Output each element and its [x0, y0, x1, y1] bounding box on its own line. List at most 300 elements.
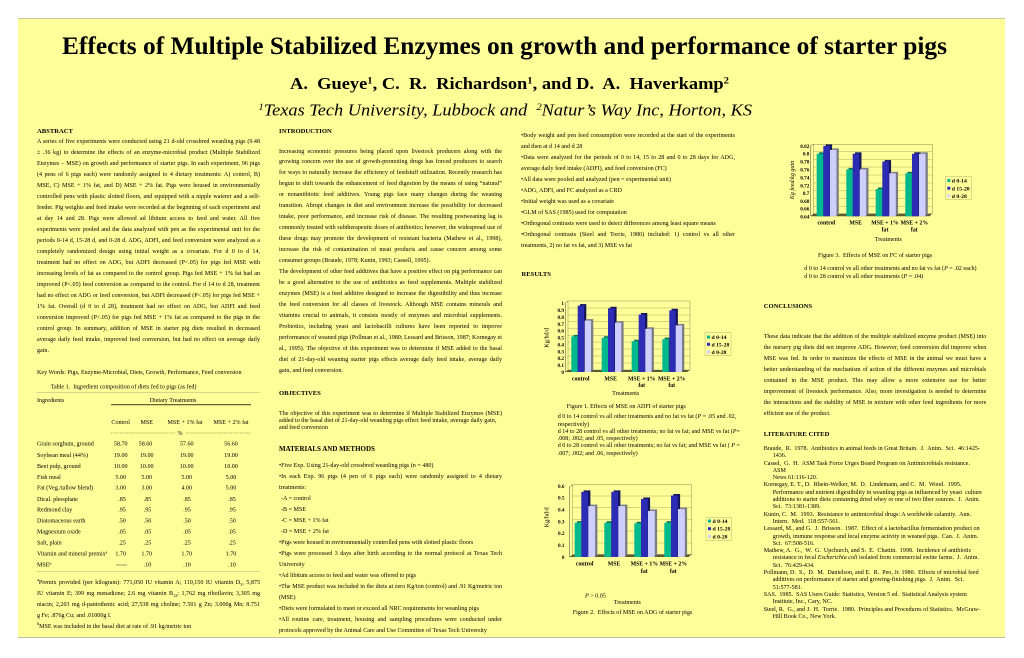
introduction text: begun to shift towards the enhancement of feed digestion by the means of using “natural” — [279, 181, 502, 187]
bars: control — [575, 490, 597, 557]
y axis title: Kg/hd/d — [544, 328, 550, 348]
table rows: 5.00 — [141, 475, 152, 481]
literature cited list: Performance and nutrient digestibility in weanling pigs as influenced by yeast culture — [773, 490, 982, 496]
objectives text: and feed conversion — [279, 425, 328, 431]
introduction text: Probiotics, including yeast and lactobacilli cultures have been reported to improve — [279, 324, 502, 330]
literature cited list: Kunin, C. M. 1993. Resistance to antimicrobial drugs: A worldwide calamity. Ann. — [764, 512, 971, 518]
y axis labels — [558, 484, 565, 561]
bars: MSE + 2% fat — [905, 152, 928, 216]
materials and methods list: University — [279, 562, 305, 568]
introduction text: consumer groups (Braude, 1978; Kunin, 1993; Cassell, 1995). — [279, 258, 430, 264]
table rows: 10.00 — [140, 464, 154, 470]
introduction text: for ways to naturally increase the efficiency of feedstuff utilization. Recently research has — [279, 170, 502, 176]
materials and methods list: protocols approved by the Animal Care and Use Committee of Texas Tech University — [279, 628, 487, 634]
table rows: 3.00 — [141, 486, 152, 492]
literature cited list — [764, 446, 982, 620]
x axis labels: MSE — [849, 220, 862, 226]
introduction text: vitamins crucial to animals, it consists mostly of enzymes and microbial supplements. — [279, 313, 502, 319]
x axis title: Treatments — [614, 600, 641, 606]
x axis labels: MSE — [604, 376, 617, 382]
table rows: 19.00 — [140, 453, 154, 459]
y axis labels: 0.9 — [558, 308, 564, 314]
methods list continued: •Initial weight was used as a covariate — [521, 199, 614, 205]
literature cited list: Pollmann, D. S., D. M. Danielson, and E. R. Peo, Jr. 1980. Effects of microbial feed — [764, 570, 979, 576]
x axis labels: fat — [911, 228, 918, 234]
table header: % — [177, 431, 183, 437]
table rows: .25 — [183, 540, 191, 546]
figure 1 caption: Figure 1. Effects of MSE on ADFI of starter pigs — [567, 404, 686, 410]
x axis labels: MSE + 1% — [631, 562, 658, 568]
table rows: 5.00 — [115, 475, 126, 481]
legend: d 0-14 — [712, 519, 728, 525]
abstract text: control group. In summary, addition of MSE in starter pig diets resulted in decreased — [37, 326, 260, 332]
authors: , C. R. Richardson — [373, 74, 527, 93]
literature cited list: growth, immune response and fecal enzyme activity in weaned pigs. Can. J. Anim. — [773, 534, 978, 540]
heading: materials and methods: MATERIALS AND METHODS — [279, 445, 375, 453]
conclusions text: MSE was fed. In order to maximize the effects of MSE in the animal we must have a — [764, 356, 986, 362]
abstract text: conversion improved (P<.05) for pigs fed MSE + 1% fat as compared to the pigs in the — [37, 315, 260, 321]
methods list continued: •Body weight and pen feed consumption were recorded at the start of the experiments — [521, 133, 735, 139]
materials and methods list: -B = MSE — [281, 507, 306, 513]
chart: figure 1 ADFI — [544, 300, 732, 397]
x axis labels: control — [817, 220, 835, 226]
y axis labels: 0.8 — [558, 315, 564, 321]
bars: MSE + 2% fat — [664, 494, 687, 557]
bars: control — [571, 304, 593, 372]
conclusions text: contained in the MSE product. This may allow a more extensive use for better — [764, 378, 986, 384]
table rows: 1.70 — [141, 551, 152, 557]
methods list continued: •Data were analyzed for the periods of 0 to 14, 15 to 28 and 0 to 28 days for ADG, — [521, 155, 735, 161]
legend: d 0-28 — [712, 534, 728, 540]
x axis labels — [817, 220, 928, 234]
figure 1 notes — [558, 414, 740, 457]
authors — [290, 74, 729, 93]
table header: Dietary Treatments — [150, 398, 197, 404]
table caption: Table 1. Ingredient composition of diets fed to pigs (as fed) — [51, 384, 196, 390]
y axis labels: 0.7 — [803, 191, 810, 197]
legend — [945, 177, 972, 200]
table rows: .95 — [118, 508, 126, 514]
x axis labels: control — [572, 376, 590, 382]
materials and methods list: •In each Exp. 96 pigs (4 pen of 6 pigs each) were randomly assigned to 4 dietary — [279, 474, 502, 480]
abstract text: increasing levels of fat as compared to the control group. Pigs fed MSE + 1% fat had an — [37, 271, 260, 277]
legend — [705, 332, 731, 356]
heading: objectives: OBJECTIVES — [279, 390, 321, 397]
table rows: 19.00 — [114, 453, 128, 459]
x axis labels: MSE + 2% — [901, 220, 928, 226]
abstract text: MSE, C) MSE + 1% fat, and D) MSE + 2% fat. Pigs were housed in environmentally — [37, 183, 260, 189]
table rows: Vitamin and mineral premix — [37, 551, 106, 557]
table rows: b — [50, 562, 52, 566]
abstract text: controlled pens with plastic slotted floors, and equipped with a nipple waterer and a self- — [37, 194, 260, 200]
legend: d 0-28 — [712, 350, 727, 356]
literature cited list: additives on performance of starter and growing-finishing pigs. J. Anim. Sci. — [773, 577, 964, 583]
affiliations: 2 — [537, 103, 542, 113]
literature cited list: News 61:116-120. — [773, 475, 817, 481]
x axis labels: MSE + 2% — [658, 376, 686, 382]
table rows: Dical. phosphate — [37, 497, 78, 503]
abstract text: improved (P<.05) feed conversion as compared to the control. For d 14 to d 28, treatment — [37, 282, 260, 288]
x axis labels — [572, 376, 686, 389]
conclusions text: the nursery pig diets did not improve ADG. However, feed conversion did improve when — [764, 345, 986, 351]
abstract text: A series of five experiments were conducted using 21 d-old crossbred weanling pigs (9.48 — [37, 139, 260, 145]
abstract text: Enzymes – MSE) on growth and performance of starter pigs. In each experiment, 96 pigs — [37, 161, 260, 167]
methods list continued: and then at d 14 and d 28 — [521, 144, 582, 150]
abstract text: had no effect on ADG or feed conversion, but ADFI decreased (P<.05) for pigs fed MSE + — [37, 293, 260, 299]
table footnotes — [37, 577, 260, 630]
table rows: .05 — [228, 530, 236, 536]
literature cited list: Hill Book Co., New York. — [773, 614, 836, 620]
literature cited list: SAS. 1985. SAS Users Guide: Statistics, Version 5 ed. Statistical Analysis system — [764, 592, 967, 598]
y axis labels: 0.7 — [558, 322, 564, 328]
table rows: Fish meal — [37, 475, 61, 481]
literature cited list: Institute, Inc., Cary, NC. — [773, 599, 832, 605]
abstract text: periods 0-14 d, 15-28 d, and 0-28 d. ADG, ADFI, and feed conversion were analyzed as a — [37, 238, 260, 244]
figure 3 caption: Figure 3. Effects of MSE on FC of starter pigs — [818, 253, 932, 259]
literature cited list: resistance in fecal Escherichia coli isolated from commercial swine farms. J. Anim. — [773, 555, 979, 561]
literature cited list: 51:577-581. — [773, 585, 802, 591]
y axis labels: 0 — [561, 370, 564, 376]
abstract text: 1% fat. Overall (d 0 to d 28), treatment had no effect on ADG, but ADFI and feed — [37, 304, 260, 310]
table header: MSE — [140, 420, 153, 426]
conclusions text: These data indicate that the addition of the multiple stabilized enzyme product (MSE) into — [764, 334, 986, 340]
abstract text: treatment had no effect on ADG, but ADFI decreased (P<.05) for pigs fed MSE with — [37, 260, 260, 266]
table rows: .10 — [183, 563, 191, 569]
table rows: 1.70 — [226, 551, 236, 557]
table rows: .50 — [228, 519, 236, 525]
bars: MSE — [602, 307, 624, 372]
table rows: 57.60 — [180, 442, 194, 448]
table rows: .10 — [228, 563, 236, 569]
bars: MSE — [604, 490, 627, 557]
heading: results: RESULTS — [522, 271, 551, 278]
figure 1 notes: d 14 to 28 control vs all other treatments; no fat vs fat; and MSE vs fat (P= — [558, 429, 740, 435]
chart: figure 2 ADG — [544, 484, 732, 606]
table rows: 1.70 — [181, 551, 192, 557]
introduction text: enzymes (MSE) is a feed additive designed to increase the digestibility and thus increase — [279, 291, 502, 297]
bars: MSE + 1% fat — [632, 313, 654, 372]
table rows: 3.00 — [115, 486, 126, 492]
introduction text: transition. Abrupt changes in diet and environment increase the possibility for decreased — [279, 203, 502, 209]
y axis labels: 0.3 — [558, 520, 565, 526]
y axis labels: 0.72 — [800, 183, 810, 189]
methods list continued: •ADG, ADFI, and FC analyzed as a CRD — [521, 188, 622, 194]
materials and methods list: •Pigs were processed 3 days after birth according to the normal protocol at Texas Tech — [279, 551, 502, 557]
table rows: .95 — [144, 508, 151, 514]
table header: MSE + 1% fat — [168, 419, 203, 426]
methods list continued: •GLM of SAS (1985) used for computation — [521, 210, 627, 216]
table rows: Beet pulp, ground — [37, 464, 81, 470]
x axis labels: fat — [882, 228, 888, 234]
legend: d 15-28 — [952, 186, 970, 192]
x axis labels: fat — [668, 383, 675, 389]
introduction text: gain, and feed conversion. — [279, 368, 343, 374]
table footnotes: b MSE was included in the basal diet at rate of .91 kg/metric ton — [37, 621, 191, 630]
literature cited list: Braude, R. 1978. Antibiotics in animal feeds in Great Britain. J. Anim. Sci. 46:1425- — [764, 446, 980, 452]
conclusions text — [764, 334, 986, 417]
table rows: Fat (Veg./tallow blend) — [37, 485, 93, 492]
figure 3 notes: d 0 to 28 control vs all other treatments (P = .04) — [804, 274, 923, 280]
table rows: .50 — [144, 519, 151, 525]
bars: control — [817, 144, 839, 216]
x axis labels: fat — [638, 383, 645, 389]
table rows: Salt, plain — [37, 540, 62, 546]
table rows: MSE — [37, 563, 50, 569]
y axis labels — [800, 144, 810, 220]
materials and methods list: (MSE) — [279, 595, 296, 601]
chart: figure 3 FC — [789, 144, 972, 243]
materials and methods list: •Five Exp. Using 21-day-old crossbred weanling pigs (n = 480) — [279, 463, 433, 469]
figure 2 caption: Figure 2. Effects of MSE on ADG of starter pigs — [573, 610, 692, 616]
table rows: 5.00 — [226, 475, 236, 481]
table footnotes: IU vitamin E; 399 mg menadione; 2.6 mg vitamin B12; 1,762 mg riboflavin; 3,305 mg — [37, 591, 260, 598]
x axis labels — [576, 562, 687, 575]
legend: d 15-28 — [712, 527, 731, 533]
table rows: .50 — [118, 519, 126, 525]
x axis labels: control — [576, 562, 594, 568]
table rows: 1.70 — [115, 551, 126, 557]
table header: Ingredients — [37, 398, 65, 404]
significance note: P > 0.05 — [584, 593, 606, 599]
authors: 1 — [527, 76, 533, 86]
affiliations — [258, 100, 753, 119]
y axis labels: 0.4 — [558, 342, 564, 348]
materials and methods list: -C = MSE + 1% fat — [281, 518, 329, 524]
abstract text: feeder. Pig weights and feed intake were recorded at the beginning of each experiment and — [37, 205, 260, 211]
authors: 2 — [724, 76, 729, 86]
y axis labels: 0.66 — [800, 207, 810, 213]
legend: d 0-14 — [712, 335, 727, 341]
figure 3 notes: d 0 to 14 control vs all other treatments and no fat vs fat (P = .02 each) — [804, 266, 977, 272]
table rows: Redmond clay — [37, 508, 73, 514]
materials and methods list: •All routine care, treatment, housing and sampling procedures were conducted under — [279, 617, 502, 623]
materials and methods list: •The MSE product was included in the diets at zero Kg/ton (control) and .91 Kg/metric ton — [279, 584, 502, 590]
materials and methods list: treatments: — [279, 485, 306, 491]
table rows: .05 — [144, 530, 151, 536]
table rows: .05 — [118, 530, 126, 536]
x axis labels: fat — [670, 569, 677, 575]
y axis labels: 0.1 — [558, 543, 565, 549]
literature cited list: Intern. Med. 118:557-561. — [773, 519, 840, 525]
materials and methods list — [279, 462, 502, 634]
introduction text: al., 1995). The objective of this experiment was to determine if MSE added to the basal — [279, 346, 502, 352]
table rows: 58.60 — [139, 442, 152, 448]
table rows: 19.00 — [224, 453, 238, 459]
abstract text — [37, 138, 260, 354]
abstract text: average daily feed intake, improved feed conversion, but had no effect on average daily — [37, 337, 260, 343]
authors: A. Gueye — [290, 74, 359, 93]
table rows: Diatomaceous earth — [37, 519, 85, 525]
legend: d 15-28 — [712, 342, 730, 348]
x axis labels: MSE + 1% — [628, 376, 656, 382]
methods list continued: average daily feed intake (ADFI), and feed conversion (FC) — [521, 166, 667, 172]
legend: d 0-28 — [952, 194, 967, 200]
literature cited list: Sci. 73:1381-1389. — [773, 504, 821, 510]
table rows: 5.00 — [181, 475, 192, 481]
y axis labels: 1 — [561, 301, 564, 307]
y axis labels: 0.5 — [558, 496, 565, 502]
x axis labels: MSE + 2% — [660, 562, 687, 568]
legend — [706, 518, 731, 540]
table rows: Magnesium oxide — [37, 530, 81, 536]
methods list continued: treatments, 2) no fat vs fat, and 3) MSE vs fat — [521, 243, 632, 249]
y axis labels: 0.74 — [800, 175, 810, 181]
table rows: 10.00 — [180, 464, 194, 470]
literature cited list: additions to starter diets containing dried whey or one of two fiber sources. J. Anim. — [773, 497, 980, 503]
figure 1 notes: .007; .002; and .06, respectively) — [558, 451, 638, 457]
key words: Key Words: Pigs, Enzyme-Microbial, Diets, Growth, Performance, Feed conversion — [37, 370, 242, 376]
figure 1 notes: d 0 to 14 control vs all other treatments and no fat vs fat (P = .05 and .02, — [558, 414, 736, 420]
y axis labels: 0.3 — [558, 350, 564, 356]
table header — [37, 398, 251, 437]
table rows: .50 — [183, 519, 191, 525]
figure 3 notes — [804, 266, 977, 280]
objectives text: added to the basal diet of 21-day-old weanling pigs effect feed intake, average daily gain, — [279, 418, 496, 424]
y axis labels: 0.8 — [803, 152, 810, 158]
heading: literature cited: LITERATURE CITED — [764, 431, 829, 438]
methods list continued: •Orthogonal contrasts were used to detect differences among least square means — [521, 221, 716, 227]
table rows: .85 — [183, 497, 191, 503]
table rows: 58.70 — [114, 442, 128, 448]
y axis labels: 0.64 — [800, 214, 810, 220]
introduction text: the feed conversion for all classes of livestock. Although MSE contains minerals and — [279, 302, 502, 308]
table rows — [37, 442, 238, 569]
authors: 1 — [367, 76, 373, 86]
y axis labels: 0.2 — [558, 356, 564, 362]
abstract text: at day 14 and 28. Pigs were allowed ad libitum access to feed and water. All five — [37, 216, 260, 222]
table rows: .85 — [228, 497, 236, 503]
introduction text: these drugs may promote the development of resistant bacteria (Mathew et al., 1998), — [279, 236, 502, 242]
affiliations: 1 — [258, 103, 264, 113]
introduction text: be a good alternative to the use of antibiotics as feed supplements. Multiple stabilized — [279, 280, 502, 286]
introduction text — [279, 148, 502, 374]
literature cited list: Kornegay, E. T., D. Rhein-Welker, M. D. Lindemann, and C. M. Wood. 1995. — [764, 482, 961, 488]
conclusions text: the interactions and the stability of MSE in mixture with other feed ingredients for more — [764, 400, 986, 406]
y axis title: Kg/hd/d — [544, 507, 550, 527]
y axis labels: 0.6 — [558, 484, 565, 490]
table 1: ingredient composition — [37, 384, 260, 572]
literature cited list: Sci. 76:429-434. — [773, 563, 815, 569]
table rows: Soybean meal (44%) — [37, 452, 88, 459]
table rows: 19.00 — [180, 453, 194, 459]
table rows: .95 — [228, 508, 236, 514]
table rows: 56.60 — [224, 442, 238, 448]
methods list continued — [521, 132, 735, 249]
bars: MSE — [846, 152, 868, 216]
objectives text — [279, 410, 502, 431]
literature cited list: Sci. 67:508-516. — [773, 541, 815, 547]
materials and methods list: •Pigs were housed in environmentally controlled pens with slotted plastic floors — [279, 540, 473, 546]
y axis labels: 0.82 — [800, 144, 810, 150]
table rows: .25 — [144, 540, 151, 546]
legend: d 0-14 — [952, 179, 967, 185]
objectives text: The objective of this experiment was to determine if Multiple Stabilized Enzymes (MSE) — [279, 411, 502, 417]
table rows: 10.00 — [114, 464, 128, 470]
y axis labels: 0.4 — [558, 508, 565, 514]
abstract text: ± .36 kg) to determine the effects of an enzyme-microbial product (Multiple Stabilized — [37, 150, 260, 156]
authors: , and D. A. Haverkamp — [533, 74, 724, 93]
methods list continued: •All data were pooled and analyzed (pen = experimental unit) — [521, 177, 671, 183]
table footnotes: niacin; 2,203 mg d-pantothenic acid; 27,538 mg choline; 7.501 g Zn; 3.000g Mn; 8.751 — [37, 602, 260, 608]
table rows: 4.00 — [181, 486, 192, 492]
introduction text: The development of other feed additives that have a positive effect on pig performance can — [279, 269, 502, 275]
methods list continued: •Orthogonal contrasts (Steel and Torrie, 1980) included: 1) control vs all other — [521, 232, 735, 238]
x axis labels: fat — [641, 569, 648, 575]
table rows: .85 — [144, 497, 151, 503]
y axis labels: 0.5 — [558, 336, 564, 342]
table footnotes: a Premix provided (per kilogram): 771,050 IU vitamin A; 110,150 IU vitamin D3, 5,875 — [37, 577, 260, 587]
y axis labels: 0.78 — [800, 160, 810, 166]
literature cited list: ASM — [773, 468, 786, 474]
figure 1 notes: d 0 to 28 control vs all other treatments; no fat vs fat; and MSE vs fat ( P = — [558, 443, 740, 449]
bars: MSE + 1% fat — [634, 498, 657, 557]
table rows: .25 — [228, 540, 236, 546]
table rows: 5.00 — [226, 486, 236, 492]
x axis title: Treatments — [875, 237, 902, 243]
heading: conclusions: CONCLUSIONS — [764, 303, 812, 310]
heading: introduction: INTRODUCTION — [279, 128, 332, 135]
table rows: .10 — [144, 563, 151, 569]
abstract text: experiments were pooled and the data analyzed with pen as the experimental unit for the — [37, 227, 260, 233]
conclusions text: efficient use of the product. — [764, 411, 831, 417]
y axis title: Kg feed/kg gain — [789, 161, 796, 200]
literature cited list: Lessard, M., and G. J. Brisson. 1987. Effect of a lactobacillus fermentation product on — [764, 526, 980, 532]
heading: abstract: ABSTRACT — [37, 128, 73, 135]
conclusions text: better understanding of the mechanism of action of the different enzymes and microbials — [764, 367, 986, 373]
introduction text: commonly treated with subtherapeutic doses of antibiotics; however, the widespread use of — [279, 225, 502, 231]
abstract text: completely randomized design using initial weight as a covariate. For d 0 to d 14, — [37, 249, 260, 255]
introduction text: or nonantibiotic feed additives. Young pigs face many changes during the weaning — [279, 192, 502, 198]
affiliations: Texas Tech University, Lubbock and — [264, 100, 537, 119]
y axis labels: 0.1 — [558, 363, 564, 369]
table rows: .05 — [183, 530, 191, 536]
table rows: .85 — [118, 497, 126, 503]
table rows: .95 — [183, 508, 191, 514]
table rows: a — [106, 550, 108, 554]
y axis labels: 0 — [562, 555, 565, 561]
materials and methods list: -A = control — [281, 496, 311, 502]
abstract text: gain. — [37, 348, 49, 354]
y axis labels: 0.2 — [558, 531, 565, 537]
x axis labels: MSE + 1% — [871, 220, 899, 226]
y axis labels: 0.6 — [558, 328, 564, 334]
introduction text: Increasing economic pressures being placed upon livestock producers along with the — [279, 148, 502, 154]
table footnotes: g Fe; .876g Cu; and .01000g I. — [37, 613, 111, 619]
y axis labels — [558, 301, 564, 376]
bars: MSE + 2% fat — [662, 309, 684, 372]
literature cited list: 1436. — [773, 453, 786, 459]
introduction text: increase the risk of contamination of meat products and cause concern among some — [279, 247, 502, 253]
table header: MSE + 2% fat — [214, 419, 249, 426]
introduction text: performance of weaned pigs (Pollman et al., 1980; Lessard and Brisson, 1987; Kornegay et — [279, 335, 502, 341]
abstract text: (4 pens of 6 pigs each) were randomly assigned to 4 dietary treatments: A) control, B) — [37, 172, 260, 178]
y axis labels: 0.76 — [800, 167, 810, 173]
introduction text: diet of 21-day-old weaning starter pigs effects average daily feed intake, average daily — [279, 357, 502, 363]
bars: MSE + 1% fat — [876, 160, 898, 216]
introduction text: growing concern over the use of growth-promoting drugs has forced producers to search — [279, 159, 502, 165]
figure 1 notes: respectively) — [558, 422, 589, 428]
figure 1 notes: .008; .002; and .05, respectively) — [558, 436, 638, 442]
x axis labels: MSE — [608, 562, 620, 568]
table rows: 10.00 — [224, 464, 238, 470]
introduction text: intake, poor performance, and increase risk of disease. The resulting postweaning lag is — [279, 214, 502, 220]
table rows: Grain sorghum, ground — [37, 442, 94, 448]
y axis labels: 0.68 — [800, 199, 810, 205]
materials and methods list: -D = MSE + 2% fat — [281, 529, 329, 535]
conclusions text: improvement of livestock performance. Also, more investigation is needed to determine — [764, 389, 986, 395]
x axis title: Treatments — [612, 391, 640, 397]
literature cited list: Mathew, A. G., W. G. Upchurch, and S. E. Chattin. 1998. Incidence of antibiotic — [764, 548, 971, 554]
